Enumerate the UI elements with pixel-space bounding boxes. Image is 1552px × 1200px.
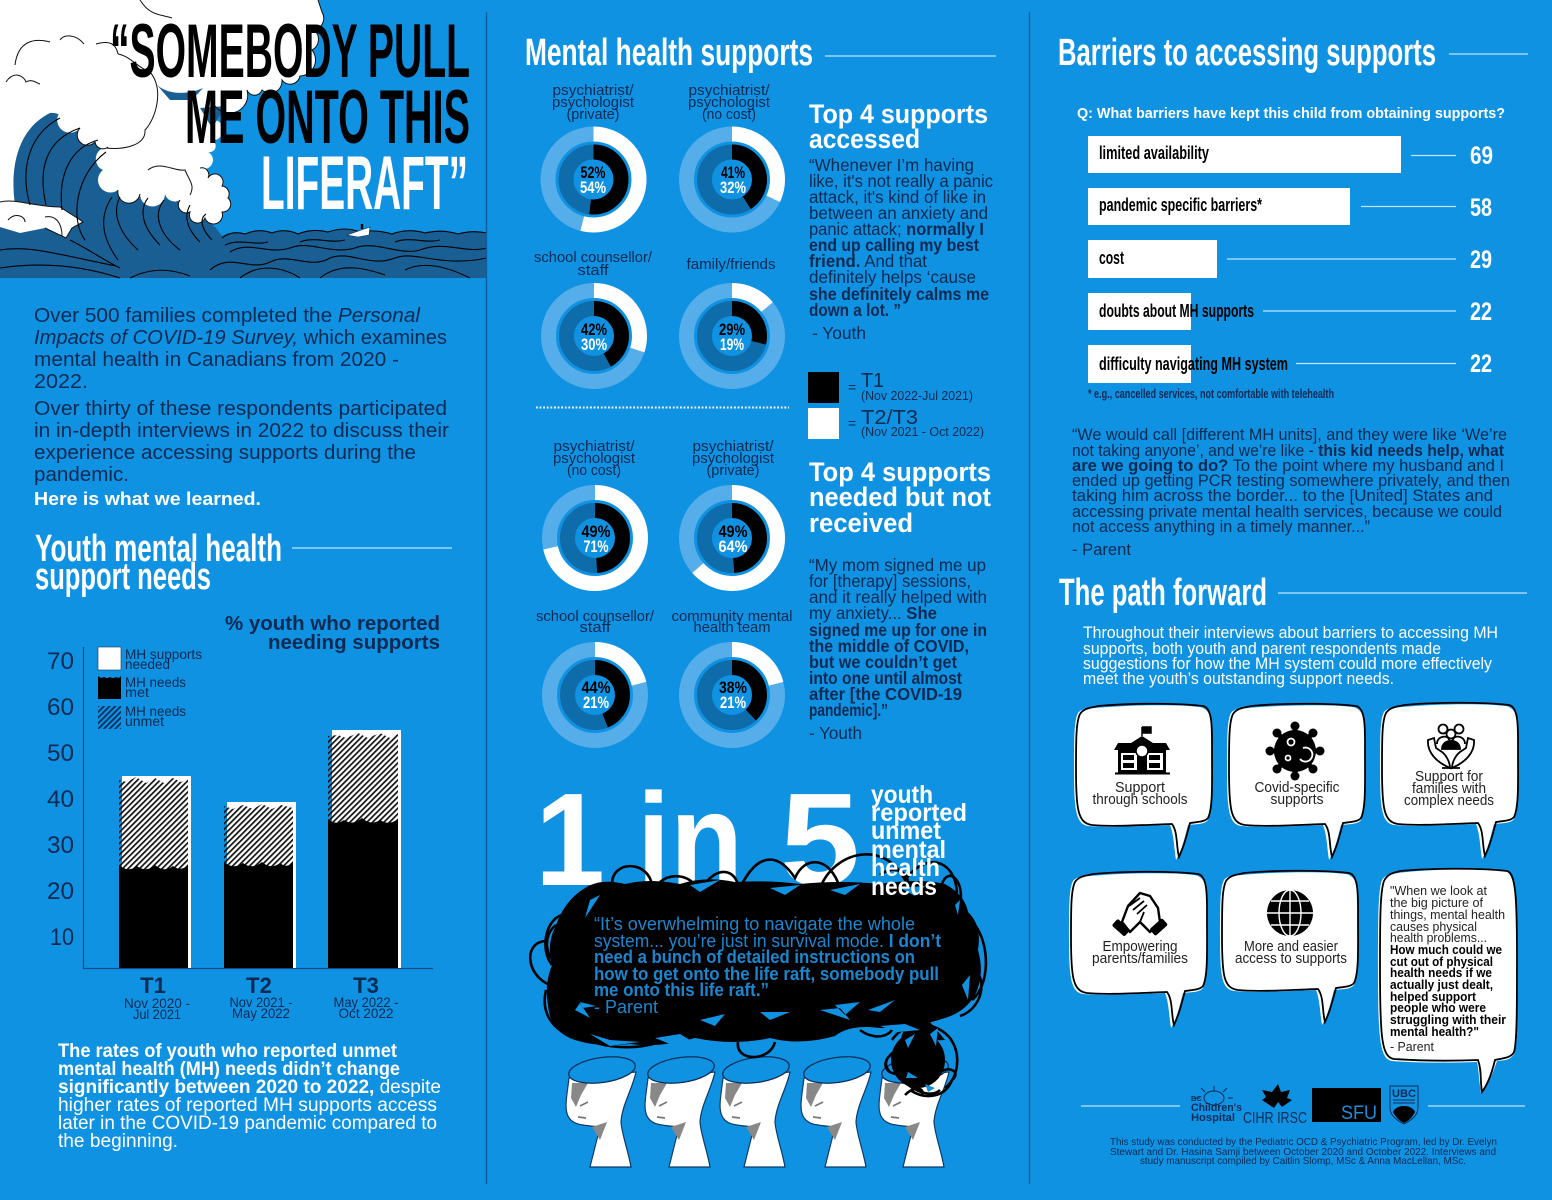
study credits: Stewart and Dr. Hasina Samji between October 2020 and October 2022. Interviews and [1110, 1146, 1496, 1158]
statistic: 1 in 5: 1 [535, 766, 605, 913]
donut: family and friends (accessed) [686, 257, 778, 382]
bar T3 [328, 730, 401, 968]
quote: youth on supports not received: pandemic].” [809, 700, 888, 720]
intro text block [34, 305, 449, 509]
statistic caption: health [871, 854, 940, 882]
donut: school counsellor (accessed): staff [578, 263, 610, 279]
donut: psychiatrist no cost (accessed): psychiatrist/ [688, 83, 771, 99]
chart title: needing supports [268, 631, 440, 654]
y axis labels: 20 [47, 878, 74, 905]
legend: T1 and T2/T3: T2/T3 [861, 407, 918, 429]
x axis labels: Oct 2022 [338, 1005, 394, 1021]
quote: parent inside scribble: system... you’re just in survival mode. I don’t [594, 931, 941, 951]
chart title: % youth who reported [225, 612, 440, 635]
title: “SOMEBODY PULL [110, 9, 470, 94]
donut: school counsellor (needed): staff [580, 620, 612, 636]
intro text block: Here is what we learned. [34, 488, 261, 509]
heads row [566, 1053, 950, 1167]
logo: UBC: UBC [1392, 1088, 1416, 1100]
x axis labels [124, 973, 399, 1022]
quote: parent on barriers [1072, 426, 1510, 559]
logos row [1081, 1084, 1525, 1127]
donut: psychiatrist private (accessed): 54% [580, 178, 606, 197]
speech bubble: covid-specific supports: supports [1270, 792, 1324, 808]
quote: youth on supports accessed: - Youth [812, 323, 866, 343]
donut: psychiatrist no cost (accessed): psychologist [688, 95, 770, 111]
legend: MH needs [125, 703, 186, 719]
quote: youth on supports not received: my anxiety... She [809, 603, 937, 623]
intro text block: mental health in Canadians from 2020 - [34, 349, 399, 371]
donut: psychiatrist no cost (needed): psychiatrist/ [554, 439, 636, 455]
text: More and easier [1244, 939, 1338, 955]
logo: BC Children's Hospital: BC [1191, 1094, 1202, 1103]
speech bubble: families with complex needs: complex needs [1404, 793, 1494, 809]
bar chart: youth needing supports [47, 646, 433, 1022]
column dividers [486, 12, 1030, 1184]
title: LIFERAFT” [261, 141, 468, 226]
donut: psychiatrist private (needed): 64% [718, 537, 748, 556]
chart takeaway text: the beginning. [58, 1130, 178, 1152]
logo: CIHR IRSC: CIHR IRSC [1243, 1110, 1307, 1127]
donut: family and friends (accessed): 19% [720, 335, 744, 354]
text: "When we look at [1390, 883, 1487, 898]
speech bubble: support through schools: through schools [1092, 792, 1188, 808]
bar: difficulty navigating MH system: 22 [1470, 350, 1492, 378]
legend: T1 and T2/T3 [808, 370, 984, 439]
logo: BC Children's Hospital: Hospital [1191, 1112, 1235, 1124]
bar: doubts about MH supports [1088, 293, 1492, 330]
y axis labels: 50 [47, 740, 74, 767]
donut: psychiatrist private (accessed): (private) [566, 107, 620, 123]
speech bubble: parent quote [1378, 869, 1517, 1093]
white foam over wave [57, 0, 324, 224]
donut: psychiatrist private (needed): psychiatrist/ [692, 439, 775, 455]
statistic caption: reported [871, 799, 967, 827]
study credits: This study was conducted by the Pediatric OCD & Psychiatric Program, led by Dr. Evelyn [1110, 1136, 1497, 1148]
donut: community mental health team (needed) [672, 609, 792, 740]
quote: parent on barriers: not access anything in a timely manner...” [1072, 518, 1370, 536]
path forward intro text: Throughout their interviews about barriers to accessing MH [1083, 624, 1498, 642]
text: actually just dealt, [1390, 977, 1493, 992]
donut: psychiatrist no cost (accessed): 41% [721, 163, 745, 182]
path forward intro text: supports, both youth and parent respondents made [1083, 640, 1441, 658]
speech bubble: empowering parents [1069, 872, 1207, 1028]
path forward intro text: suggestions for how the MH system could more effectively [1083, 655, 1493, 673]
quote: youth on supports accessed [809, 155, 993, 343]
icon: globe [1267, 890, 1313, 936]
chart takeaway text: mental health (MH) needs didn’t change [58, 1058, 400, 1080]
icon: virus [1266, 722, 1324, 780]
text: cut out of physical [1390, 954, 1493, 969]
logo: SFU [1312, 1088, 1381, 1124]
quote: parent inside scribble: need a bunch of detailed instructions on [594, 947, 915, 967]
chart takeaway text: higher rates of reported MH supports access [58, 1094, 437, 1116]
heading: the path forward: The path forward [1059, 572, 1267, 614]
heading: top 4 supports accessed [809, 99, 988, 154]
donut: psychiatrist private (accessed): psychiatrist/ [552, 83, 635, 99]
quote: parent inside scribble: me onto this life raft.” [594, 980, 769, 1000]
bar: pandemic specific barriers: pandemic specific barriers* [1099, 195, 1262, 215]
donut: psychiatrist no cost (accessed) [686, 83, 778, 225]
path forward intro text: meet the youth’s outstanding support needs. [1083, 670, 1394, 688]
x axis labels: T3 [353, 973, 379, 998]
bar: cost: 29 [1470, 246, 1492, 274]
donut: psychiatrist no cost (needed) [550, 439, 640, 584]
logo: BC Children's Hospital [1191, 1086, 1242, 1124]
y axis labels: 10 [50, 924, 74, 951]
statistic: 1 in 5 [535, 766, 860, 913]
bar: limited availability: 69 [1470, 142, 1493, 170]
bar: pandemic specific barriers: 58 [1470, 194, 1492, 222]
icon: school [1114, 727, 1170, 774]
heading: top 4 supports needed: received [809, 508, 913, 538]
y axis labels: 60 [47, 694, 74, 721]
boat [347, 224, 370, 237]
donut: school counsellor (accessed): 42% [581, 320, 607, 339]
quote: youth on supports accessed: between an anxiety and [809, 203, 988, 223]
heading: top 4 supports needed: needed but not [809, 482, 991, 512]
legend: T1 and T2/T3: T1 [861, 370, 884, 392]
x axis labels: T1 [140, 973, 166, 998]
chart takeaway text: later in the COVID-19 pandemic compared to [58, 1112, 437, 1134]
statistic caption: mental [871, 836, 946, 864]
heading: mental health supports: Mental health supports [525, 32, 813, 74]
legend: needed [125, 656, 170, 672]
donut: psychiatrist no cost (accessed): (no cost) [702, 107, 756, 123]
x axis labels: Jul 2021 [133, 1006, 181, 1022]
bar: doubts about MH supports: 22 [1470, 298, 1492, 326]
big dark wave and sea [0, 113, 487, 278]
y axis labels: 70 [47, 648, 74, 675]
chart takeaway text [58, 1040, 441, 1152]
quote: youth on supports not received: after [the COVID-19 [809, 684, 962, 704]
quote: youth on supports accessed: friend. And that [809, 251, 927, 271]
bar: difficulty navigating MH system [1088, 345, 1492, 383]
donut: psychiatrist no cost (needed): psychologist [553, 451, 635, 467]
x axis labels: Nov 2020 - [124, 995, 190, 1011]
speech bubble: families with complex needs [1380, 703, 1518, 859]
quote: parent on barriers: ended up getting PCR testing somewhere privately, and then [1072, 472, 1510, 490]
donut: community mental health team (needed): community mental [672, 609, 792, 625]
speech bubble: covid-specific supports [1227, 704, 1365, 860]
title [110, 9, 470, 226]
donut: community mental health team (needed): 38% [719, 678, 747, 697]
title: ME ONTO THIS [185, 75, 470, 160]
speech bubble: more and easier access: access to supports [1235, 951, 1347, 967]
quote: parent inside scribble: - Parent [594, 997, 658, 1017]
text: Covid-specific [1254, 780, 1340, 796]
speech bubble: more and easier access [1220, 871, 1358, 1025]
heading: top 4 supports accessed: Top 4 supports [809, 99, 988, 129]
x axis labels: May 2022 - [334, 994, 399, 1010]
donut: psychiatrist no cost (needed): (no cost) [567, 463, 621, 479]
logo: SFU: SFU [1341, 1103, 1377, 1124]
speech bubble: empowering parents: parents/families [1092, 951, 1188, 967]
text: - Parent [1390, 1039, 1434, 1054]
donut: psychiatrist private (needed): 49% [718, 522, 748, 541]
quote: youth on supports accessed: “Whenever I’m having [809, 155, 974, 175]
quote: youth on supports accessed: down a lot. ” [809, 300, 901, 320]
bar: cost: cost [1099, 248, 1124, 268]
y axis labels: 40 [47, 786, 74, 813]
icon: clasped hands [1112, 893, 1168, 937]
legend: MH needs [125, 674, 186, 690]
quote: parent inside scribble [594, 914, 941, 1017]
legend [98, 646, 202, 729]
donut: community mental health team (needed): 21% [720, 693, 746, 712]
donut: school counsellor (accessed) [534, 250, 653, 382]
donut: psychiatrist private (needed): psychologist [692, 451, 774, 467]
statistic caption: unmet [871, 817, 942, 845]
quote: youth on supports not received: but we couldn’t get [809, 652, 957, 672]
bar: limited availability [1088, 136, 1493, 173]
bar chart: barriers [1088, 136, 1493, 383]
legend: T1 and T2/T3: (Nov 2021 - Oct 2022) [861, 424, 984, 439]
text: struggling with their [1390, 1012, 1506, 1027]
bar T1 [119, 776, 191, 968]
intro text block: in in-depth interviews in 2022 to discuss their [34, 420, 449, 442]
heading: youth mental health support needs: support needs [35, 556, 211, 598]
x axis labels: Nov 2021 - [230, 994, 293, 1010]
legend: met [125, 684, 149, 700]
intro text block: experience accessing supports during the [34, 442, 416, 464]
quote: youth on supports accessed: she definitely calms me [809, 284, 989, 304]
intro text block: Impacts of COVID-19 Survey, which examines [34, 327, 447, 349]
donut: school counsellor (needed): school counsellor/ [536, 609, 655, 625]
donut: psychiatrist no cost (accessed): 32% [720, 178, 746, 197]
legend: T1 and T2/T3: = [848, 379, 856, 395]
heading: youth mental health support needs [35, 528, 452, 598]
donut: family and friends (accessed): family/friends [686, 257, 776, 273]
logo: CIHR IRSC [1243, 1084, 1307, 1127]
y axis labels [47, 648, 74, 951]
legend: T1 and T2/T3: (Nov 2022-Jul 2021) [861, 388, 973, 403]
text: How much could we [1390, 942, 1502, 957]
x axis labels: T2 [246, 973, 272, 998]
quote: youth on supports not received: - Youth [809, 723, 862, 743]
statistic caption: youth [871, 781, 933, 809]
donut: psychiatrist no cost (needed): 71% [584, 537, 608, 556]
quote: parent on barriers: are we going to do? To the point where my husband and I [1072, 457, 1504, 475]
quote: parent on barriers: - Parent [1072, 541, 1131, 559]
text: people who were [1390, 1000, 1486, 1015]
quote: youth on supports not received: and it really helped with [809, 587, 987, 607]
heading: top 4 supports needed [809, 457, 991, 538]
text: mental health?" [1390, 1024, 1479, 1039]
speech bubble: families with complex needs: families with [1412, 781, 1486, 797]
statistic: 1 in 5: in [637, 766, 743, 913]
quote: youth on supports not received [809, 555, 987, 743]
quote: youth on supports accessed: panic attack; normally I [809, 219, 984, 239]
bar: limited availability: limited availability [1099, 143, 1209, 163]
quote: youth on supports not received: the middle of COVID, [809, 636, 969, 656]
heading: youth mental health support needs: Youth mental health [35, 528, 282, 570]
donut: psychiatrist private (accessed): psychologist [552, 95, 634, 111]
donut: school counsellor (accessed): school counsellor/ [534, 250, 653, 266]
text: health problems... [1390, 930, 1487, 945]
header illustration: tsunami wave [0, 0, 487, 278]
legend: MH supports [125, 646, 202, 662]
footnote: * e.g., cancelled services, not comfortable with telehealth [1088, 386, 1334, 401]
quote: parent inside scribble: “It’s overwhelming to navigate the whole [594, 914, 915, 934]
quote: parent on barriers: accessing private mental health services, because we could [1072, 503, 1502, 521]
foam outlines [77, 0, 324, 224]
donut: psychiatrist private (needed) [686, 439, 778, 584]
donut: psychiatrist private (needed): (private) [706, 463, 760, 479]
donut: school counsellor (needed): 44% [582, 678, 610, 697]
statistic caption [871, 781, 967, 901]
donut: school counsellor (needed) [536, 609, 655, 740]
quote: parent on barriers: not taking anyone’, and we’re like - this kid needs help, what [1072, 442, 1504, 460]
bar: cost [1088, 240, 1492, 278]
heading: top 4 supports accessed: accessed [809, 124, 920, 154]
quote: parent on barriers: taking him across the border... to the [United] States and [1072, 487, 1493, 505]
statistic caption: needs [871, 873, 937, 901]
donut: community mental health team (needed): health team [694, 620, 770, 636]
donut: psychiatrist private (accessed) [548, 83, 639, 225]
quote: parent inside scribble: how to get onto the life raft, somebody pull [594, 964, 939, 984]
bar: difficulty navigating MH system: difficulty navigating MH system [1099, 354, 1288, 374]
text: the big picture of [1390, 895, 1483, 910]
donut: family and friends (accessed): 29% [719, 320, 745, 339]
y axis labels: 30 [47, 832, 74, 859]
path forward intro text [1083, 624, 1498, 688]
legend: unmet [125, 713, 164, 729]
text: health needs if we [1390, 965, 1492, 980]
intro text block: Over thirty of these respondents participated [34, 398, 447, 420]
tangled scribble thought cloud [530, 854, 986, 1096]
speech bubble: support through schools [1074, 704, 1212, 860]
bar T2 [224, 802, 296, 968]
logo: UBC [1390, 1086, 1418, 1124]
text: Support [1115, 780, 1165, 796]
text: Empowering [1102, 939, 1178, 955]
quote: youth on supports not received: signed me up for one in [809, 620, 987, 640]
intro text block: Over 500 families completed the Personal [34, 305, 421, 327]
text: Support for [1415, 769, 1483, 785]
x axis labels: May 2022 [232, 1005, 290, 1021]
bar: doubts about MH supports: doubts about MH supports [1099, 301, 1254, 321]
logo: BC Children's Hospital: Children's [1191, 1102, 1242, 1114]
donut: school counsellor (needed): 21% [583, 693, 609, 712]
icon: hands holding family [1428, 724, 1474, 768]
study credits: study manuscript compiled by Caitlin Slomp, MSc & Anna MacLellan, MSc. [1140, 1155, 1466, 1167]
quote: parent on barriers: “We would call [different MH units], and they were like ‘We’re [1072, 426, 1507, 444]
heading: top 4 supports needed: Top 4 supports [809, 457, 991, 487]
bar: pandemic specific barriers [1088, 188, 1492, 225]
quote: youth on supports not received: for [therapy] sessions, [809, 571, 971, 591]
text [1390, 883, 1506, 1054]
quote: youth on supports accessed: attack, it's kind of like in [809, 187, 986, 207]
study credits [1110, 1136, 1497, 1167]
quote: youth on supports accessed: end up calling my best [809, 235, 979, 255]
text: causes physical [1390, 919, 1477, 934]
legend: T1 and T2/T3: = [848, 415, 856, 431]
quote: youth on supports not received: “My mom signed me up [809, 555, 986, 575]
chart takeaway text: The rates of youth who reported unmet [58, 1040, 397, 1062]
intro text block: 2022. [34, 371, 88, 393]
donut: psychiatrist no cost (needed): 49% [582, 522, 610, 541]
intro text block: pandemic. [34, 464, 129, 486]
statistic: 1 in 5: 5 [780, 766, 860, 913]
quote: youth on supports accessed: like, it's not really a panic [809, 171, 993, 191]
quote: youth on supports not received: into one until almost [809, 668, 962, 688]
donut: school counsellor (accessed): 30% [581, 335, 607, 354]
quote: youth on supports accessed: definitely helps ‘cause [809, 267, 976, 287]
text: things, mental health [1390, 907, 1505, 922]
wave crest lines [26, 118, 212, 260]
text: helped support [1390, 989, 1477, 1004]
chart takeaway text: significantly between 2020 to 2022, despite [58, 1076, 441, 1098]
survey question: Q: What barriers have kept this child from obtaining supports? [1077, 105, 1505, 122]
donut: psychiatrist private (accessed): 52% [580, 163, 606, 182]
chart title [225, 612, 440, 654]
